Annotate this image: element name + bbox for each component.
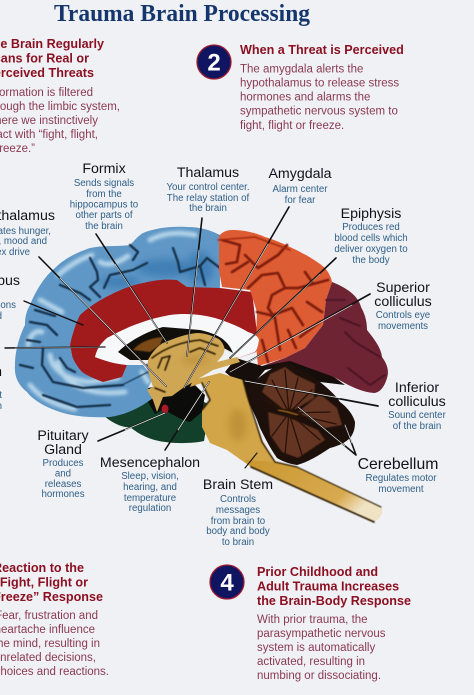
label: amygdala: Alarm center <box>273 184 328 195</box>
text: step 1 body <box>0 87 120 155</box>
label: pituitary gland: Produces <box>43 458 84 469</box>
heading: step 4 <box>257 565 411 608</box>
label: superior colliculus: Superior <box>376 280 430 296</box>
brain illustration <box>15 227 388 522</box>
line: amygdala <box>184 207 289 388</box>
text: step 2 body: sympathetic nervous system to <box>240 106 398 118</box>
text: step 4 body: numbing or dissociating. <box>257 670 381 682</box>
label: formix: Formix <box>82 161 126 177</box>
brain: orange parietal lobe <box>219 230 332 366</box>
line: epiphysis <box>230 258 336 358</box>
label: amygdala: Amygdala <box>268 166 332 182</box>
icon: number 4 badge: 4 <box>220 570 234 596</box>
label: mesencephalon: hearing, and <box>123 482 177 493</box>
brain: maroon occipital lobe <box>262 282 388 393</box>
label: pituitary gland: Pituitary <box>37 428 90 444</box>
label: cerebellum: Regulates motor <box>365 473 437 484</box>
brain: brown corpus detail <box>133 337 163 352</box>
panel: step 1 brain scans <box>0 37 120 155</box>
panel: step 4 prior trauma <box>210 565 411 682</box>
label: thalamus: Your control center. <box>166 182 250 193</box>
heading: step 4: Prior Childhood and <box>257 565 378 579</box>
label: superior colliculus: Controls eye <box>376 310 430 321</box>
label: mesencephalon: Sleep, vision, <box>121 471 179 482</box>
icon: number 2 badge: 2 <box>207 50 221 76</box>
brain: cerebellum orange centre <box>278 410 298 415</box>
text: step 4 body: With prior trauma, the <box>257 614 368 626</box>
label: formix: the brain <box>85 221 123 232</box>
label: mesencephalon: Mesencephalon <box>100 455 200 471</box>
text: step 2 body: The amygdala alerts the <box>240 64 363 76</box>
icon: number 2 badge <box>197 45 231 79</box>
label: brain stem: Brain Stem <box>203 477 273 493</box>
label: inferior colliculus: colliculus <box>388 394 446 410</box>
brain: cerebellum fold lines <box>265 370 336 455</box>
label: thalamus: the brain <box>189 203 227 214</box>
line: mesencephalon <box>165 382 209 450</box>
label: epiphysis: blood cells which <box>334 233 408 244</box>
label: epiphysis <box>334 206 408 266</box>
label: epiphysis: the body <box>352 255 390 266</box>
label: superior colliculus <box>374 280 432 332</box>
label: mesencephalon: temperature <box>124 493 176 504</box>
brain: maroon folds <box>326 300 385 385</box>
label: brain stem: from brain to <box>211 516 265 527</box>
brain: black shadow above cerebellum <box>225 358 345 430</box>
line: formix <box>96 234 167 343</box>
label: cerebellum <box>358 456 438 495</box>
text: step 3 body <box>0 610 109 678</box>
title: Trauma Brain Processing <box>54 1 310 27</box>
line: pituitary <box>98 413 165 441</box>
leader lines <box>5 207 378 468</box>
brain: pituitary gland <box>162 404 168 414</box>
line: cerebellum <box>298 407 356 455</box>
brain: dark green base <box>104 392 210 443</box>
brain: blue frontal lobe <box>15 227 220 417</box>
label: inferior colliculus <box>388 380 447 432</box>
label: hippocampus: ons <box>0 300 16 311</box>
label: thalamus: Thalamus <box>177 165 239 181</box>
brain: blue sulci <box>20 245 220 407</box>
line: superior colliculus <box>230 294 370 372</box>
brain: thalamus creases <box>152 340 381 522</box>
label: formix: hippocampus to <box>70 200 138 210</box>
label: cerebellum: Cerebellum <box>358 456 438 473</box>
brain: orange sulci <box>218 237 328 362</box>
heading: step 4: Adult Trauma Increases <box>257 580 399 594</box>
label: mesencephalon: regulation <box>129 503 171 514</box>
label: inferior colliculus: Sound center <box>388 410 447 421</box>
label: brain stem: Controls <box>220 494 256 505</box>
label: brain stem: body and body <box>206 526 270 537</box>
heading: step 4: the Brain-Body Response <box>257 594 411 608</box>
line: thalamus <box>187 218 202 356</box>
brain: cerebellum lobes <box>262 367 342 458</box>
line: hippocampus <box>24 301 83 325</box>
label: formix: other parts of <box>75 210 133 221</box>
brain: black shadow under thalamus <box>148 380 205 422</box>
label: brain stem <box>203 477 273 548</box>
label: hypothalamus <box>0 208 55 258</box>
line: inferior colliculus <box>245 381 378 406</box>
line: hypothalamus <box>39 257 166 386</box>
brain: cerebellum <box>247 363 355 465</box>
text: step 2 body: fight, flight or freeze. <box>240 120 344 132</box>
icon: number 4 badge <box>210 565 244 599</box>
label: brain stem: messages <box>216 505 260 516</box>
label: inferior colliculus: Inferior <box>395 380 439 396</box>
text: step 4 body: system is automatically <box>257 642 375 654</box>
label: formix: Sends signals <box>74 178 134 189</box>
label: inferior colliculus: of the brain <box>393 421 441 432</box>
line: brain stem <box>245 453 257 468</box>
brain: brain stem taper <box>245 460 382 522</box>
brain: midbrain and brain stem yellow <box>190 373 382 522</box>
label: hippocampus <box>0 273 20 322</box>
label: amygdala <box>268 166 332 206</box>
text: step 4 body: activated, resulting in <box>257 656 365 668</box>
label: thalamus <box>166 165 250 214</box>
label: pituitary gland: hormones <box>41 489 85 500</box>
text: step 2 body <box>240 64 399 132</box>
heading: step 2: When a Threat is Perceived <box>240 43 404 57</box>
brain: mid blue gyri shading <box>100 252 214 288</box>
label: cerebellum: movement <box>378 484 424 495</box>
text: step 4 body <box>257 614 386 682</box>
brain: yellow mottling <box>181 356 247 441</box>
text: step 4 body: parasympathetic nervous <box>257 628 386 640</box>
label: mesencephalon <box>100 455 200 514</box>
label: superior colliculus: movements <box>378 321 428 332</box>
label: brain stem: to brain <box>222 537 254 548</box>
brain: pale blue gyri highlights <box>28 233 195 409</box>
heading: step 1 <box>0 37 104 80</box>
label: superior colliculus: colliculus <box>374 294 432 310</box>
label: pituitary gland: releases <box>45 479 81 490</box>
label: clipped left label <box>0 364 2 412</box>
label: pituitary gland: Gland <box>44 442 82 458</box>
label: pituitary gland: and <box>55 468 71 480</box>
heading: step 3 <box>0 561 103 604</box>
text: step 2 body: hypothalamus to release stress <box>240 78 399 90</box>
label: formix: from the <box>86 189 122 200</box>
panel: step 3 reaction <box>0 561 109 678</box>
text: step 2 body: hormones and alarms the <box>240 92 370 104</box>
brain: red cingulate band <box>70 280 259 382</box>
label: epiphysis: deliver oxygen to <box>334 244 408 255</box>
label: epiphysis: Epiphysis <box>341 206 401 222</box>
label: thalamus: The relay station of <box>167 193 249 204</box>
label: pituitary gland <box>37 428 90 500</box>
brain: thalamus yellow <box>147 333 240 412</box>
brain: dark fornix shadow <box>118 327 233 360</box>
label: formix <box>70 161 138 232</box>
label: amygdala: for fear <box>285 195 316 206</box>
brain: white ventricle crescent <box>95 314 259 365</box>
panel: step 2 threat perceived <box>197 43 404 132</box>
label: epiphysis: Produces red <box>342 222 400 233</box>
line: left label <box>5 347 105 348</box>
